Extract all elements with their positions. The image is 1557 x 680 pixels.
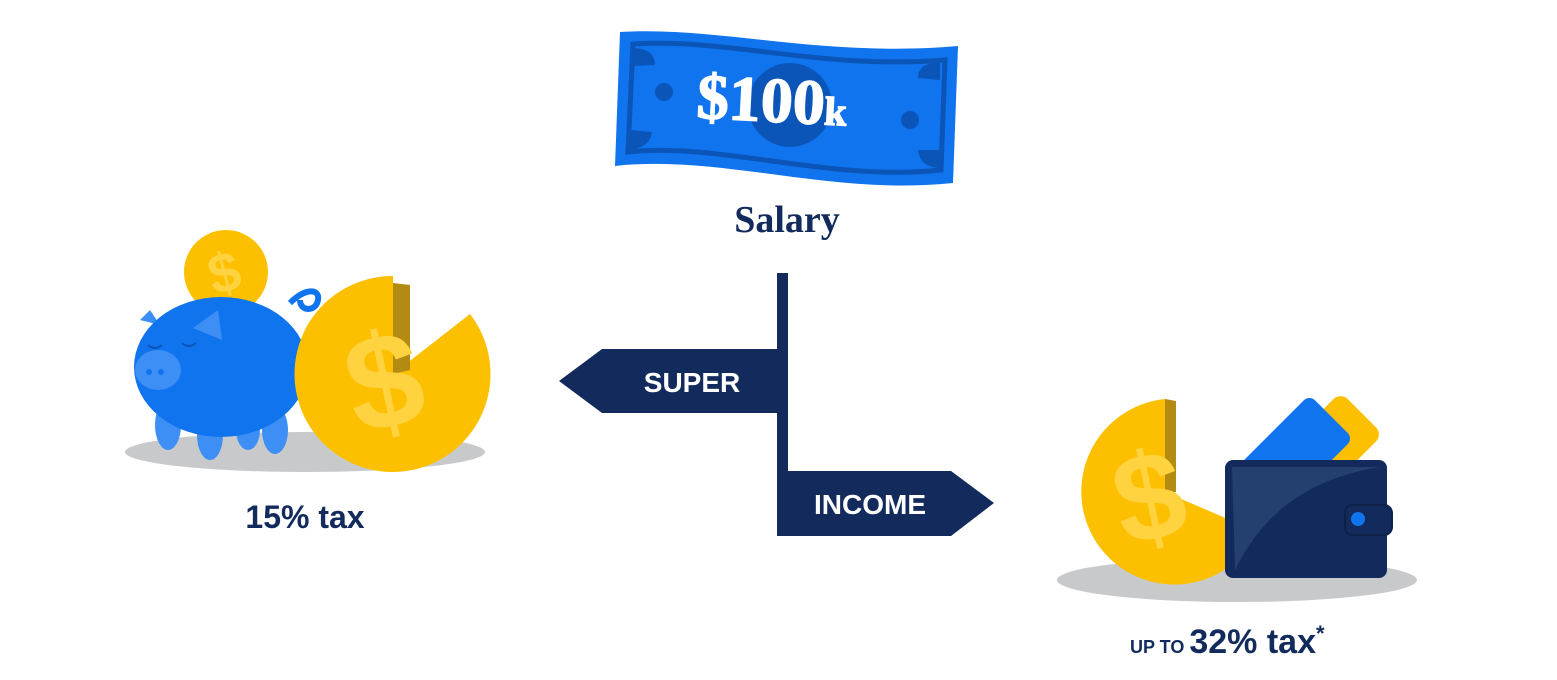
arrow: income: INCOME <box>814 489 926 520</box>
illustration: coin and wallet: $ <box>1101 422 1198 573</box>
signpost <box>559 273 994 536</box>
arrow: income <box>777 471 994 536</box>
label: 15% tax: 15% tax <box>245 499 365 535</box>
illustration: coin and wallet <box>1057 392 1417 602</box>
arrow: super <box>559 349 777 413</box>
label: up to 32% tax: UP TO 32% tax <box>1130 623 1316 661</box>
arrow: super: SUPER <box>644 367 740 398</box>
illustration: piggy bank with coin: $ <box>201 238 247 307</box>
label: up to 32% tax: * <box>1316 621 1325 646</box>
illustration: piggy bank with coin <box>125 230 491 472</box>
heading: Salary: Salary <box>734 199 840 241</box>
illustration: piggy bank with coin: $ <box>332 300 437 463</box>
icon: banknote <box>615 31 958 186</box>
text: $100k: $100k <box>695 61 850 140</box>
